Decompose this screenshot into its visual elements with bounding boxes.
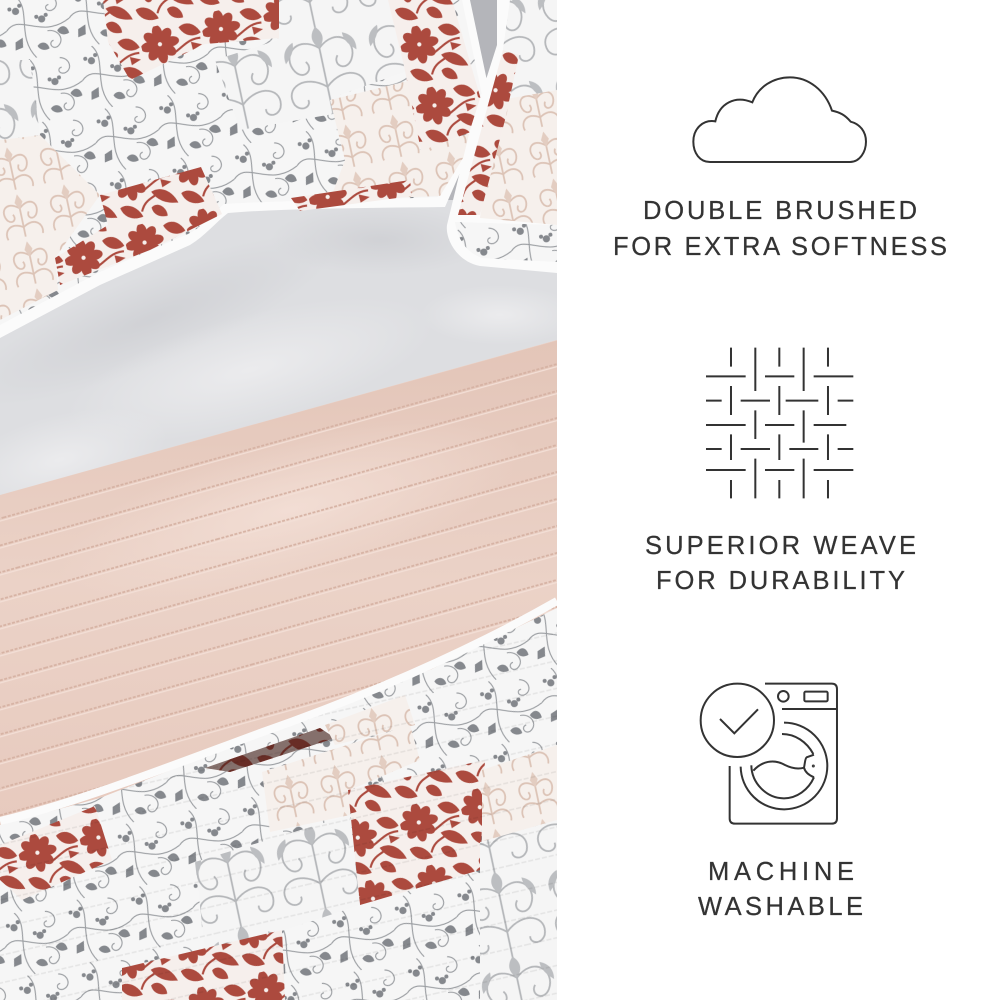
heading: machine washable <box>698 858 863 921</box>
panel: bedding photo <box>0 0 580 1000</box>
duvet patch: red centre <box>348 760 485 905</box>
icon: weave <box>706 348 853 498</box>
heading: double brushed: FOR EXTRA SOFTNESS <box>613 233 947 261</box>
large pillow <box>0 0 490 338</box>
pillow patch: red top <box>103 0 279 80</box>
heading: double brushed <box>613 197 947 261</box>
duvet patch: light scroll right <box>480 820 557 1000</box>
duvet patch: red left <box>0 806 112 900</box>
small pillow <box>447 0 557 273</box>
heading: superior weave: SUPERIOR WEAVE <box>645 532 916 560</box>
pillow patch: beige damask <box>330 82 469 198</box>
pillow patch: beige left <box>0 135 100 320</box>
heading: double brushed: DOUBLE BRUSHED <box>643 197 917 225</box>
duvet white edge <box>0 601 557 821</box>
heading: machine washable: WASHABLE <box>698 893 863 921</box>
heading: superior weave <box>645 532 916 595</box>
quilt with white edge <box>0 340 557 828</box>
pillow patch: light scroll left <box>0 60 40 140</box>
pillow patch: light scroll <box>215 0 410 130</box>
icon: cloud <box>693 77 866 162</box>
duvet patch: beige right <box>482 745 557 842</box>
duvet patch: beige centre <box>262 725 420 832</box>
pillow patch: red edge <box>291 180 412 211</box>
heading: superior weave: FOR DURABILITY <box>656 567 905 595</box>
pillow patch: red lower <box>55 167 222 285</box>
duvet patch: beige fold <box>325 695 415 745</box>
grey sheet <box>0 0 557 495</box>
icon: washing machine with check <box>701 684 837 824</box>
pillow patch: red right <box>388 0 484 151</box>
red stripe on small pillow <box>458 50 519 215</box>
duvet patch: light scroll centre <box>195 815 360 950</box>
duvet patch: red bottom <box>122 930 285 1000</box>
duvet patch: dark shaded fold <box>205 728 335 772</box>
heading: machine washable: MACHINE <box>708 858 854 886</box>
patterned duvet <box>0 601 557 1000</box>
